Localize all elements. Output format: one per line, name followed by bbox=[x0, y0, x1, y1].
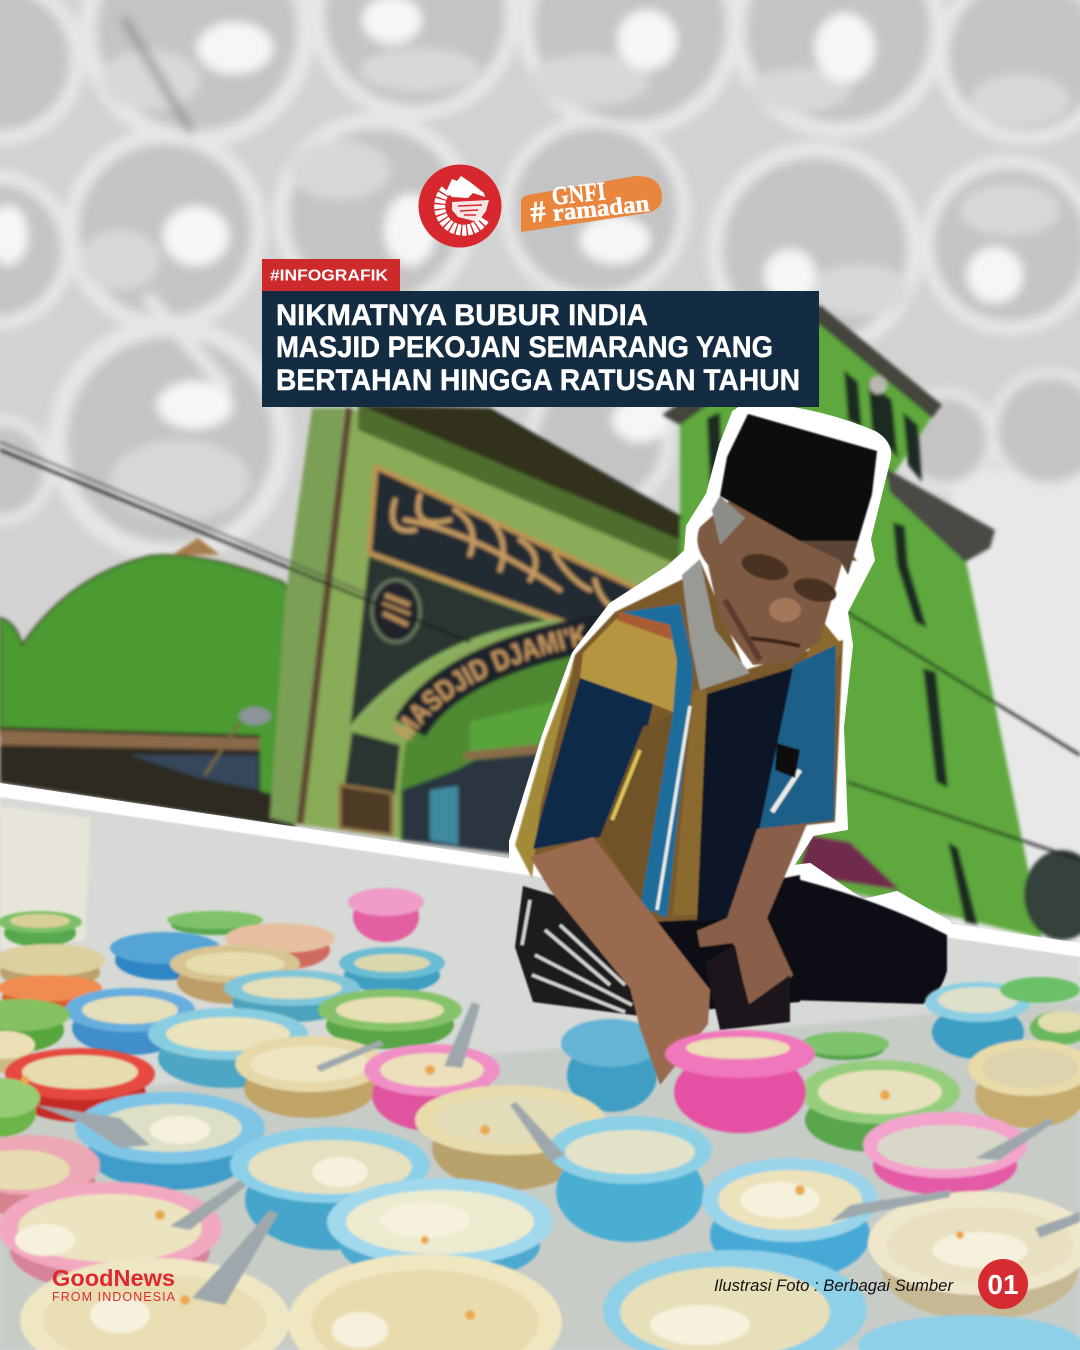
white streaks bbox=[657, 706, 800, 910]
forearm and hand bbox=[530, 837, 710, 1085]
logo: #GNFI ramadan badge bbox=[521, 172, 662, 232]
dark ornament panel bbox=[350, 556, 600, 728]
sleeve bbox=[533, 678, 653, 849]
title block: NIKMATNYA BUBUR INDIA bbox=[276, 299, 648, 332]
black trousers bbox=[680, 878, 947, 1004]
mosque building bbox=[0, 303, 1080, 942]
dark body base behind arms bbox=[640, 875, 800, 1010]
logo: GoodNews from Indonesia bbox=[52, 1265, 176, 1304]
roundel bbox=[372, 580, 420, 642]
shirt right panel bbox=[757, 645, 836, 829]
tower bbox=[662, 305, 1042, 938]
shirt base bbox=[530, 560, 843, 922]
inner arch and door bbox=[400, 650, 580, 860]
sleeve stripe bbox=[600, 714, 673, 908]
logo: #GNFI ramadan badge: GNFI bbox=[550, 176, 607, 211]
centre navy panel bbox=[697, 668, 793, 922]
lower roof and windows bbox=[0, 727, 295, 828]
striped trousers bbox=[515, 886, 640, 1016]
man white cut-out outline bbox=[510, 402, 955, 1000]
page number: 01 bbox=[987, 1269, 1019, 1300]
logo: GNFI garuda emblem bbox=[418, 164, 502, 248]
gate outer pillar bbox=[270, 408, 345, 825]
spoons bbox=[35, 1002, 1080, 1305]
white diagonal band bbox=[0, 783, 1080, 975]
title block: BERTAHAN HINGGA RATUSAN TAHUN bbox=[276, 364, 800, 397]
head bbox=[697, 496, 858, 665]
tag: #INFOGRAFIK: #INFOGRAFIK bbox=[270, 268, 388, 284]
brown stripe bbox=[673, 690, 707, 915]
calligraphy panel bbox=[369, 467, 640, 644]
floor bbox=[0, 797, 1080, 1350]
tag: #INFOGRAFIK bbox=[262, 259, 400, 292]
logo: GoodNews from Indonesia: GoodNews bbox=[52, 1265, 175, 1291]
yellow shoulder bbox=[580, 618, 677, 712]
street lamp bbox=[205, 707, 271, 775]
green dome bbox=[0, 555, 296, 800]
second forearm and hand bbox=[697, 824, 807, 1008]
man bbox=[515, 414, 947, 1085]
title block bbox=[262, 291, 819, 407]
gate front wall bbox=[302, 408, 700, 880]
bowls in front bbox=[0, 977, 1080, 1350]
right shoulder bbox=[803, 618, 842, 668]
title block: MASJID PEKOJAN SEMARANG YANG bbox=[276, 331, 773, 364]
background: grayscale bowls photo bbox=[0, 0, 1080, 950]
logo: #GNFI ramadan badge: ramadan bbox=[551, 191, 651, 227]
logo: GoodNews from Indonesia: FROM INDONESIA bbox=[52, 1290, 176, 1304]
grey collar bbox=[682, 559, 750, 690]
blue band bbox=[623, 604, 693, 918]
maroon roof behind knee bbox=[800, 835, 900, 890]
thin green arc bbox=[352, 622, 560, 728]
right edge tree bbox=[1024, 850, 1080, 940]
left sleeve hem bbox=[515, 660, 575, 878]
bowls behind the man bbox=[0, 888, 661, 1112]
arch name band: MASDJID DJAMI'K bbox=[393, 622, 586, 743]
page number bbox=[978, 1259, 1028, 1309]
egg and food pieces bbox=[15, 1116, 1028, 1348]
photo credit: Ilustrasi Foto : Berbagai Sumber bbox=[714, 1277, 955, 1295]
gate roof bands bbox=[358, 405, 700, 574]
gate side trim bbox=[300, 408, 349, 824]
black cap bbox=[720, 414, 877, 541]
dark lap lump bbox=[705, 945, 790, 1030]
logo: #GNFI ramadan badge: # bbox=[529, 195, 547, 229]
dome finial bbox=[172, 538, 220, 555]
overhead wires bbox=[0, 410, 1080, 860]
